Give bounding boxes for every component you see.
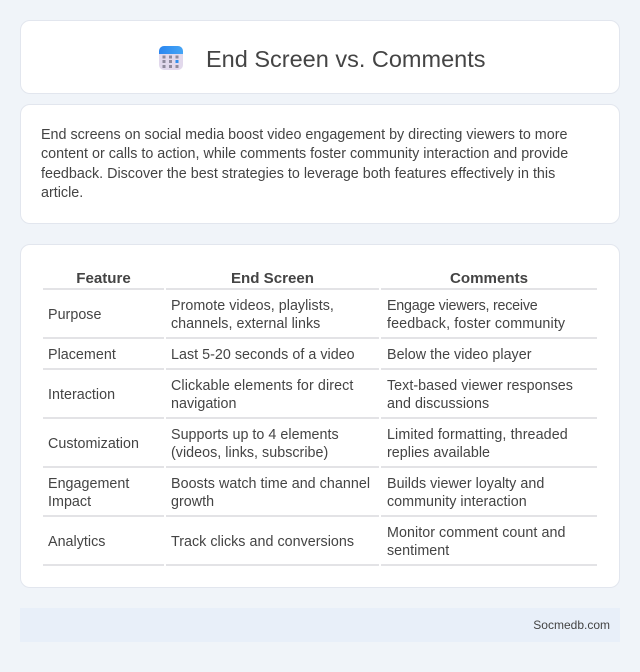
row: purpose: feedback, foster community (387, 316, 565, 332)
row: interaction: Interaction (48, 387, 115, 403)
row: interaction (48, 378, 573, 412)
intro text: feedback. Discover the best strategies to leverage both features effectively in this (41, 166, 555, 182)
row: purpose (48, 298, 565, 332)
row: engagement impact: Engagement (48, 476, 129, 492)
row: interaction: Clickable elements for direct (171, 378, 353, 394)
intro text (41, 127, 568, 201)
row: analytics: Track clicks and conversions (171, 534, 354, 550)
row: placement: Last 5-20 seconds of a video (171, 347, 355, 363)
column headers: End Screen (231, 270, 314, 287)
column headers: Feature (76, 270, 131, 287)
row: placement (48, 347, 532, 363)
row: interaction: Text-based viewer responses (387, 378, 573, 394)
intro text: article. (41, 185, 83, 201)
row: customization: Supports up to 4 elements (171, 427, 339, 443)
footer text: Socmedb.com (533, 618, 610, 632)
row: customization: replies available (387, 445, 490, 461)
row: interaction: and discussions (387, 396, 489, 412)
row: engagement impact: Boosts watch time and channel (171, 476, 370, 492)
footer bar (20, 608, 620, 642)
icon: calendar (159, 46, 183, 70)
column headers: Comments (450, 270, 528, 287)
title card (20, 20, 620, 94)
row: engagement impact: community interaction (387, 494, 527, 510)
row: interaction: navigation (171, 396, 236, 412)
intro text: End screens on social media boost video engagement by directing viewers to more (41, 127, 567, 143)
column headers (76, 270, 528, 287)
row: engagement impact: Impact (48, 494, 91, 510)
row: analytics: Analytics (48, 534, 105, 550)
row: purpose: Purpose (48, 307, 101, 323)
row: engagement impact (48, 476, 544, 510)
row: engagement impact: Builds viewer loyalty and (387, 476, 544, 492)
intro card (20, 104, 620, 224)
row: customization: Limited formatting, threaded (387, 427, 568, 443)
row: analytics: sentiment (387, 543, 449, 559)
row: purpose: Promote videos, playlists, (171, 298, 334, 314)
row: customization: (videos, links, subscribe) (171, 445, 328, 461)
heading: End Screen vs. Comments (206, 46, 486, 72)
row: customization (48, 427, 568, 461)
row: engagement impact: growth (171, 494, 214, 510)
row: purpose: Engage viewers, receive (387, 298, 537, 314)
row: placement: Placement (48, 347, 116, 363)
intro text: content or calls to action, while comments foster community interaction and provide (41, 146, 568, 162)
row: customization: Customization (48, 436, 139, 452)
row: analytics: Monitor comment count and (387, 525, 565, 541)
row: placement: Below the video player (387, 347, 532, 363)
table card (20, 244, 620, 588)
row: purpose: channels, external links (171, 316, 320, 332)
